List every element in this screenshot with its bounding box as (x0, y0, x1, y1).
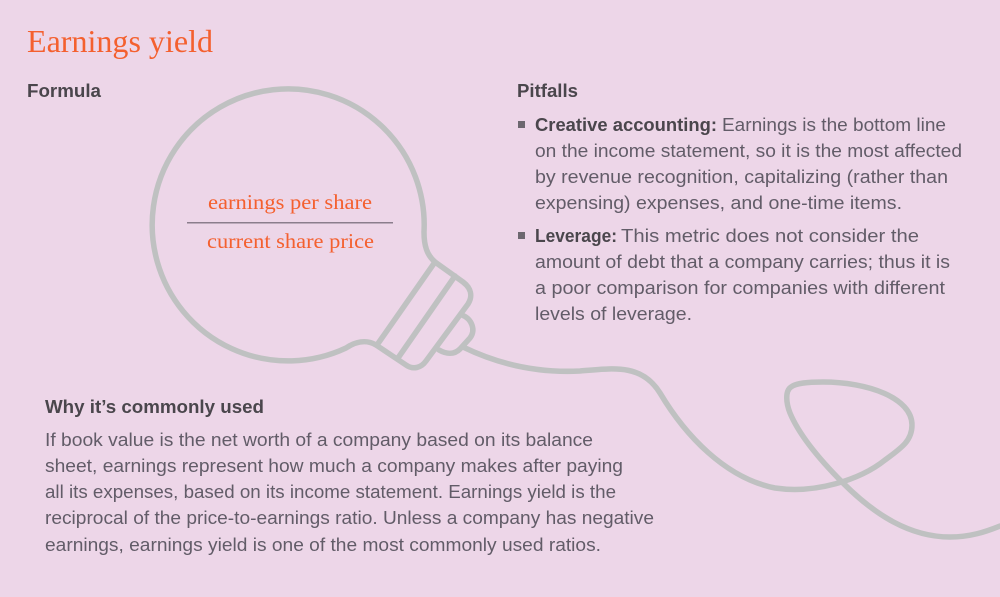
pitfalls heading: Pitfalls (517, 81, 578, 101)
pitfall: leverage (518, 226, 950, 324)
why it's commonly used text: earnings, earnings yield is one of the most commonly used ratios. (45, 535, 601, 555)
formula: current share price (207, 229, 374, 253)
why it's commonly used text: sheet, earnings represent how much a company makes after paying (45, 456, 623, 476)
pitfall: creative accounting (518, 115, 962, 213)
why it's commonly used heading: Why it’s commonly used (45, 397, 264, 417)
formula: earnings per share (208, 190, 372, 214)
pitfall: creative accounting: Creative accounting: (535, 115, 717, 135)
pitfall: creative accounting: expensing) expenses, and one-time items. (535, 193, 902, 213)
pitfall: creative accounting: on the income statement, so it is the most affected (535, 141, 962, 161)
icon: light bulb with cord (152, 89, 1000, 537)
pitfall: leverage: Leverage: (535, 226, 617, 246)
pitfall: leverage: This metric does not consider the (621, 226, 919, 246)
pitfall: creative accounting: by revenue recognition, capitalizing (rather than (535, 167, 948, 187)
why it's commonly used text: reciprocal of the price-to-earnings ratio. Unless a company has negative (45, 508, 654, 528)
pitfall: creative accounting: Earnings is the bottom line (722, 115, 946, 135)
why it's commonly used text: all its expenses, based on its income statement. Earnings yield is the (45, 482, 616, 502)
pitfall: leverage: a poor comparison for companies with different (535, 278, 945, 298)
pitfall: leverage: levels of leverage. (535, 304, 692, 324)
why it's commonly used text: If book value is the net worth of a company based on its balance (45, 430, 593, 450)
formula heading: Formula (27, 81, 102, 101)
why it's commonly used text (45, 430, 654, 555)
formula (187, 190, 393, 253)
pitfall: leverage: amount of debt that a company carries; thus it is (535, 252, 950, 272)
title: Earnings yield (27, 23, 213, 59)
